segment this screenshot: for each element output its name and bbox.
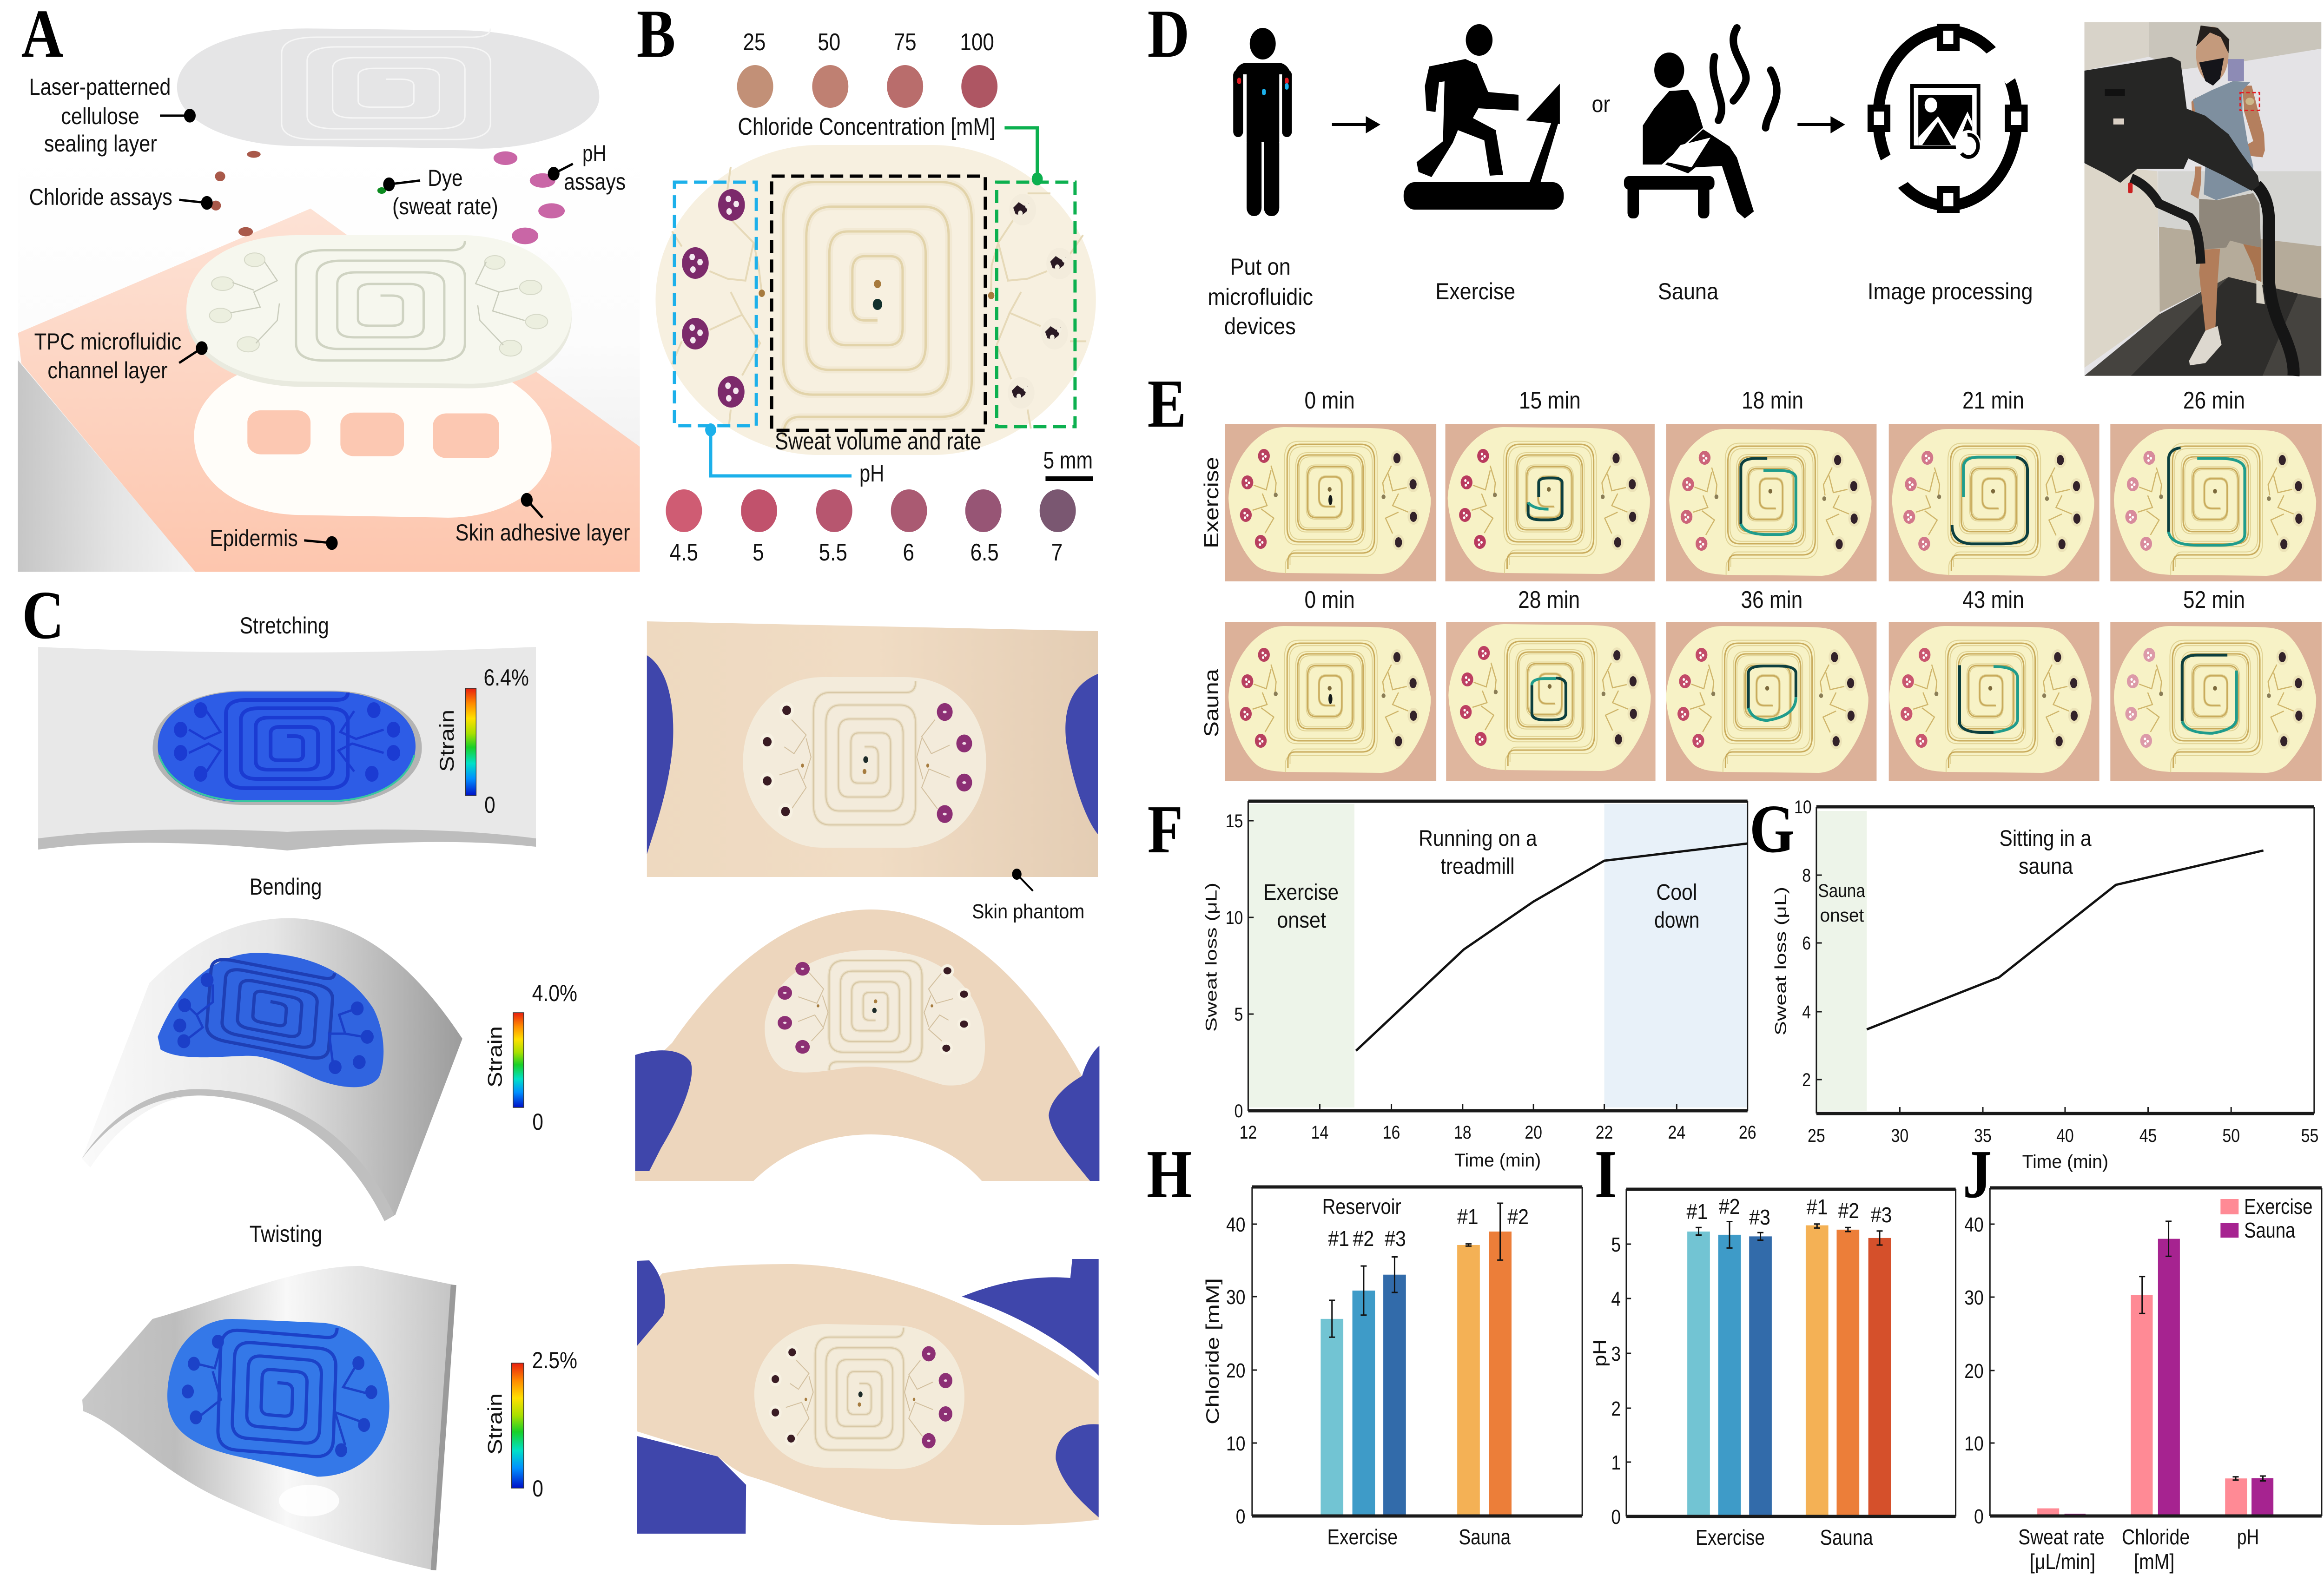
tick labels: 4 [1611,1287,1621,1311]
tick labels: 30 [1226,1285,1245,1309]
photo: subject on treadmill [2084,22,2321,376]
chloride assays [211,151,261,236]
tick labels: 14 [1311,1121,1328,1143]
annotations: Cool [1656,880,1697,905]
dashed region: pH [674,182,756,426]
row label: exercise: Exercise [1200,457,1223,548]
tick labels: 15 [1226,810,1243,831]
tick labels: 2 [1611,1397,1621,1420]
reservoir labels: #2 [1838,1199,1859,1223]
bending photo [635,909,1099,1181]
scale bar: 5 mm [1043,447,1093,474]
tick labels: 20 [1525,1121,1542,1143]
x axis labels: Exercise [1696,1526,1765,1550]
tick labels: 0 [1235,1100,1243,1121]
sauna time labels: 0 min [1304,587,1355,613]
twisting colour bar [484,1347,577,1502]
step labels: devices [1224,313,1296,339]
panel F: exercise sweat loss chart [1148,791,1756,1171]
tick labels: 22 [1596,1121,1613,1143]
tick labels [1611,1233,1621,1529]
sweat loss line [1356,844,1748,1051]
tick labels: 6 [1802,932,1811,954]
twisting colour bar: 2.5% [532,1347,577,1373]
reservoir labels: #1 [1807,1195,1828,1219]
skin phantom callout [972,869,1084,923]
chloride concentration label: Chloride Concentration [mM] [738,113,996,140]
step labels: microfluidic [1208,284,1313,310]
3D scene: skin and background [18,152,640,572]
cellulose sealing layer [177,28,599,149]
tick labels: 8 [1802,864,1811,886]
tick labels: 45 [2139,1125,2157,1146]
panel A: exploded device layers [18,0,640,572]
stretching simulation [38,647,536,850]
chloride colour swatches: 100 [960,29,994,56]
x axis title: Time (min) [2022,1151,2108,1172]
dashed region: chloride [997,182,1075,427]
error bars [1696,1221,1882,1248]
arrow [1332,116,1380,133]
labels for panel A [29,74,630,551]
tick labels: 10 [1964,1432,1984,1455]
reservoir labels: #3 [1749,1206,1770,1230]
labels for panel A: Laser-patterned [29,74,171,100]
labels for panel A: (sweat rate) [392,193,498,219]
x axis labels: [mM] [2134,1550,2174,1574]
labels for panel A: TPC microfluidic [34,329,181,355]
sauna time labels [1304,587,2245,613]
labels for panel A: pH [582,140,607,166]
bending simulation [82,918,462,1221]
y axis title: Sweat loss (μL) [1202,883,1220,1032]
tick labels: 12 [1240,1121,1257,1143]
blue leader [705,423,852,476]
panel letter F: F [1148,791,1183,867]
x axis labels: Sweat rate [2018,1525,2105,1549]
green leader [1004,128,1043,185]
reservoir labels: #3 [1385,1227,1406,1251]
tick labels: 30 [1891,1125,1908,1146]
step labels: Image processing [1868,278,2033,304]
reservoir labels [1687,1195,1892,1230]
callout leaders [160,110,573,549]
reservoir labels [1322,1195,1529,1251]
x axis labels [2018,1525,2259,1574]
tick labels: 18 [1454,1121,1472,1143]
axes frame [1248,801,1748,1111]
panel letter H: H [1147,1136,1192,1212]
twisting colour bar: 0 [532,1476,543,1502]
tick labels: 30 [1964,1286,1984,1309]
stretching title: Stretching [240,613,329,639]
annotations [1818,826,2092,926]
pH assays [494,152,565,244]
pH colour swatches: 5 [753,539,764,566]
tick labels: 10 [1794,796,1812,817]
twisting colour bar: Strain [484,1393,506,1455]
tick labels: 10 [1226,1432,1245,1455]
x axis labels [1696,1526,1873,1550]
labels for panel A: assays [564,169,626,195]
panel J: combined bar chart [1963,1136,2322,1574]
skin adhesive layer [194,364,552,518]
dashed region: sweat volume [772,176,985,430]
exercise time labels: 0 min [1304,387,1355,414]
reservoir labels: #3 [1871,1203,1892,1227]
skin phantom callout: Skin phantom [972,900,1084,923]
step labels: Put on [1230,254,1291,280]
exercise time labels: 18 min [1742,387,1803,414]
sauna time labels: 28 min [1518,587,1580,613]
axes frame [1816,807,2314,1114]
x axis labels: Sauna [1820,1526,1873,1550]
twisting simulation [82,1266,454,1570]
bending colour bar: 4.0% [532,980,577,1006]
annotations: Exercise [1263,880,1339,905]
exercise time labels [1304,387,2245,414]
tick labels: 1 [1611,1451,1621,1474]
x axis labels: Exercise [1327,1525,1398,1549]
tick labels: 0 [1236,1505,1245,1528]
tick labels: 20 [1964,1359,1984,1383]
icon: sauna person [1624,28,1777,218]
exercise time labels: 26 min [2183,387,2245,414]
tick labels: 5 [1235,1003,1243,1025]
error bars [1329,1203,1503,1337]
sauna time labels: 52 min [2183,587,2245,613]
labels for panel A: Dye [428,165,463,191]
panel letter I: I [1594,1136,1617,1212]
axes frame [1626,1189,1956,1516]
annotations: onset [1820,904,1864,926]
y axis title: Chloride [mM] [1202,1278,1223,1424]
panel C: strain simulations and photos [22,577,1099,1570]
annotations [1263,826,1699,933]
reservoir labels: #1 [1457,1205,1479,1229]
labels for panel A: Epidermis [210,525,298,551]
legend: Sauna [2244,1219,2295,1243]
labels for panel A: channel layer [47,357,168,383]
icon: treadmill runner [1404,24,1564,210]
annotations: treadmill [1440,854,1515,879]
panel D: protocol icons [1148,0,2321,376]
dye [377,187,386,194]
annotations: Sauna [1818,880,1865,901]
labels for panel A: cellulose [61,103,139,129]
y axis title: pH [1590,1339,1610,1367]
reservoir labels: #2 [1507,1205,1529,1229]
annotations: Sitting in a [2000,826,2092,851]
y axis title: Sweat loss (μL) [1772,887,1789,1035]
x axis labels [1327,1525,1511,1549]
row label: sauna: Sauna [1200,669,1223,737]
tick labels: 24 [1668,1121,1685,1143]
labels for panel A: Chloride assays [29,184,172,210]
pH label: pH [859,460,884,487]
step labels: Sauna [1658,278,1718,304]
stretching colour bar [436,665,529,818]
legend [2220,1195,2312,1243]
reservoir labels: #2 [1353,1227,1374,1251]
device tiles [1225,424,2322,781]
stretching photo [647,621,1098,877]
bars [2037,1239,2273,1516]
tick labels: 4 [1802,1001,1811,1022]
axes frame [1252,1187,1582,1516]
step labels [1208,254,2033,339]
tick labels: 40 [1226,1213,1245,1236]
panel H: chloride bar chart [1147,1136,1582,1549]
pH colour swatches: 4.5 [670,539,698,566]
annotations: onset [1277,908,1327,933]
reservoir labels: Reservoir [1322,1195,1401,1219]
pH colour swatches: 7 [1051,539,1063,566]
axes frame [1990,1188,2322,1516]
panel I: pH bar chart [1590,1136,1956,1550]
panel letter E: E [1148,365,1186,442]
bending colour bar: Strain [484,1026,506,1087]
annotations: sauna [2019,854,2073,879]
chloride colour swatches: 25 [743,29,766,56]
tick labels: 3 [1611,1342,1621,1365]
panel letter J: J [1963,1136,1992,1212]
chloride colour swatches [737,29,997,108]
bending title: Bending [250,874,322,900]
reservoir labels: #1 [1687,1200,1708,1224]
stretching colour bar: 6.4% [483,665,529,691]
tick labels: 10 [1226,907,1243,928]
x axis labels: pH [2237,1525,2259,1549]
labels for panel A: sealing layer [44,131,157,157]
sweat volume label: Sweat volume and rate [775,428,981,455]
annotations: down [1654,908,1699,933]
panel E: time-lapse device images [1148,365,2322,781]
stretching colour bar: Strain [436,710,458,772]
or label: or [1591,91,1610,117]
exercise time labels: 21 min [1962,387,2024,414]
panel G: sauna sweat loss chart [1750,791,2318,1172]
x axis labels: Sauna [1459,1525,1511,1549]
pH colour swatches: 6.5 [971,539,999,566]
sweat loss line [1867,850,2264,1029]
arrow [1797,116,1845,133]
tick labels: 0 [1611,1505,1621,1529]
tick labels: 26 [1739,1121,1756,1143]
pH colour swatches: 5.5 [819,539,847,566]
tick labels: 50 [2222,1125,2240,1146]
tick labels: 5 [1611,1233,1621,1256]
tick labels: 35 [1974,1125,1992,1146]
phase shading [1248,804,1748,1107]
legend: Exercise [2244,1195,2312,1219]
sauna time labels: 43 min [1962,587,2024,613]
tick labels: 16 [1383,1121,1400,1143]
twisting photo [637,1259,1099,1534]
tick labels: 2 [1802,1069,1811,1090]
reservoir labels: #2 [1719,1195,1740,1219]
tick labels: 40 [2056,1125,2074,1146]
icon: image processing [1868,24,2028,213]
tick labels [1226,810,1756,1143]
chloride colour swatches: 75 [894,29,917,56]
stretching colour bar: 0 [484,792,495,818]
bending colour bar: 0 [532,1109,543,1135]
tick labels: 20 [1226,1359,1245,1382]
bending colour bar [484,980,577,1135]
reservoir labels: #1 [1328,1227,1349,1251]
annotations: Running on a [1419,826,1537,851]
icon: person with devices [1233,28,1292,216]
panel B: device photograph and colour references [637,0,1096,566]
exercise time labels: 15 min [1519,387,1581,414]
tick labels: 0 [1974,1505,1984,1528]
phase shading [1816,811,1867,1111]
tick labels: 55 [2301,1125,2318,1146]
error bars [2139,1221,2266,1481]
tick labels [1794,796,2318,1146]
sauna time labels: 36 min [1741,587,1802,613]
tick labels [1964,1213,1984,1528]
tick labels [1226,1213,1245,1528]
x axis labels: [μL/min] [2030,1550,2095,1574]
step labels: Exercise [1435,278,1515,304]
tick labels: 40 [1964,1213,1984,1236]
x axis labels: Chloride [2122,1525,2190,1549]
twisting title: Twisting [250,1221,322,1247]
tick labels: 25 [1808,1125,1825,1146]
TPC microfluidic channel layer [186,235,572,389]
x axis title: Time (min) [1454,1149,1541,1171]
labels for panel A: Skin adhesive layer [456,520,630,546]
chloride colour swatches: 50 [818,29,840,56]
bars [1687,1226,1891,1516]
panel letter G: G [1750,791,1795,867]
dye front traces [1528,448,2245,733]
pH colour swatches [666,489,1076,566]
panel letter C: C [22,577,64,653]
pH colour swatches: 6 [903,539,914,566]
device photograph [655,145,1096,455]
bars [1320,1232,1512,1516]
